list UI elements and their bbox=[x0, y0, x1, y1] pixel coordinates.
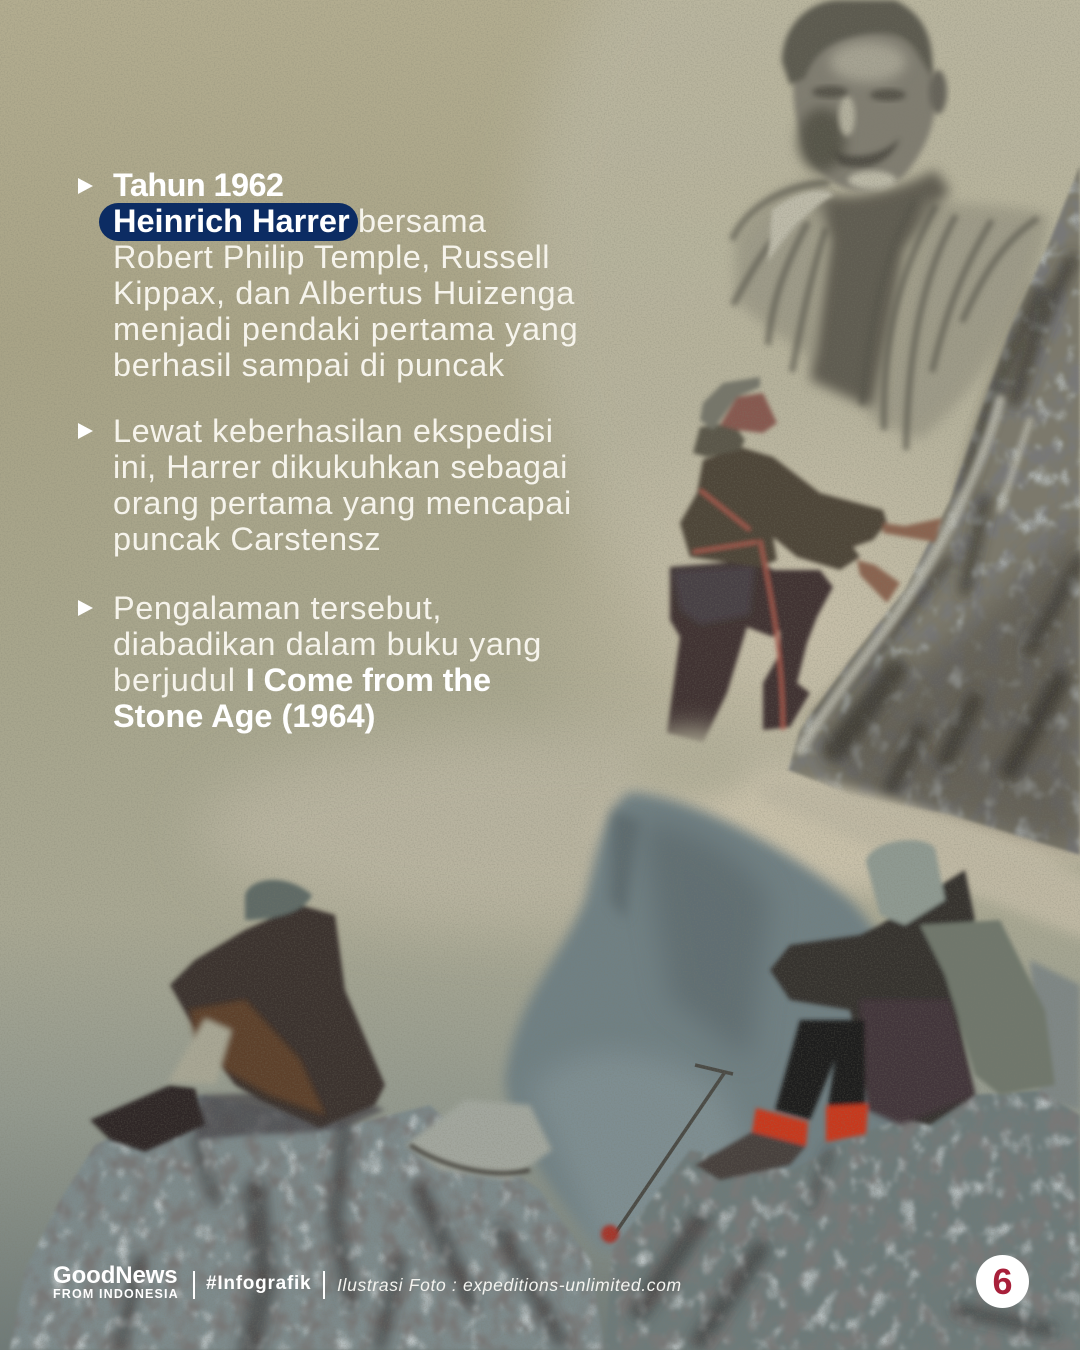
hashtag: #Infografik bbox=[206, 1273, 311, 1294]
seated climber left bbox=[90, 880, 385, 1152]
portrait of Heinrich Harrer bbox=[732, 0, 1050, 450]
bullet arrow 3 bbox=[78, 600, 93, 616]
body text 2 bbox=[113, 413, 572, 557]
body text 1: menjadi pendaki pertama yang bbox=[113, 311, 578, 347]
body text 3: diabadikan dalam buku yang bbox=[113, 626, 542, 662]
body text 2: puncak Carstensz bbox=[113, 521, 381, 557]
central misty peak bbox=[505, 792, 900, 1250]
text block 2 bbox=[78, 413, 572, 557]
heading: Tahun 1962: Tahun 1962 bbox=[113, 167, 283, 203]
text block 1 bbox=[78, 167, 578, 383]
body text 2: orang pertama yang mencapai bbox=[113, 485, 572, 521]
text block 3 bbox=[78, 590, 542, 734]
body text 2: Lewat keberhasilan ekspedisi bbox=[113, 413, 554, 449]
body text 1: bersama bbox=[358, 203, 486, 239]
body text 1: Heinrich Harrer bbox=[113, 203, 350, 239]
seated climber right bbox=[695, 840, 1055, 1180]
logo: GoodNews from Indonesia: FROM INDONESIA bbox=[53, 1287, 179, 1301]
climber bbox=[667, 377, 942, 743]
body text 3 bbox=[113, 590, 542, 734]
page number badge bbox=[976, 1255, 1029, 1308]
body text 2: ini, Harrer dikukuhkan sebagai bbox=[113, 449, 568, 485]
footer bbox=[53, 1262, 682, 1301]
body text 1: Robert Philip Temple, Russell bbox=[113, 239, 550, 275]
rock face on the right bbox=[760, 165, 1080, 940]
bullet arrow 2 bbox=[78, 423, 93, 439]
body text 3: Pengalaman tersebut, bbox=[113, 590, 442, 626]
body text 1: berhasil sampai di puncak bbox=[113, 347, 505, 383]
logo: GoodNews from Indonesia: GoodNews bbox=[53, 1262, 178, 1289]
ice axe bbox=[601, 1065, 733, 1243]
logo: GoodNews from Indonesia bbox=[53, 1262, 179, 1301]
distant rock right bbox=[1030, 960, 1080, 1110]
highlight: Heinrich Harrer bbox=[99, 203, 358, 241]
body text 1: Kippax, dan Albertus Huizenga bbox=[113, 275, 575, 311]
page number badge: 6 bbox=[992, 1261, 1013, 1302]
backpack on the rock bbox=[405, 1100, 552, 1180]
body text 1 bbox=[113, 203, 578, 383]
bottom rocks bbox=[10, 1090, 1080, 1350]
body text 3: Stone Age (1964) bbox=[113, 698, 375, 734]
photo credit: Ilustrasi Foto : expeditions-unlimited.com bbox=[337, 1275, 682, 1295]
bullet arrow 1 bbox=[78, 178, 93, 194]
body text 3: berjudul I Come from the bbox=[113, 662, 491, 698]
